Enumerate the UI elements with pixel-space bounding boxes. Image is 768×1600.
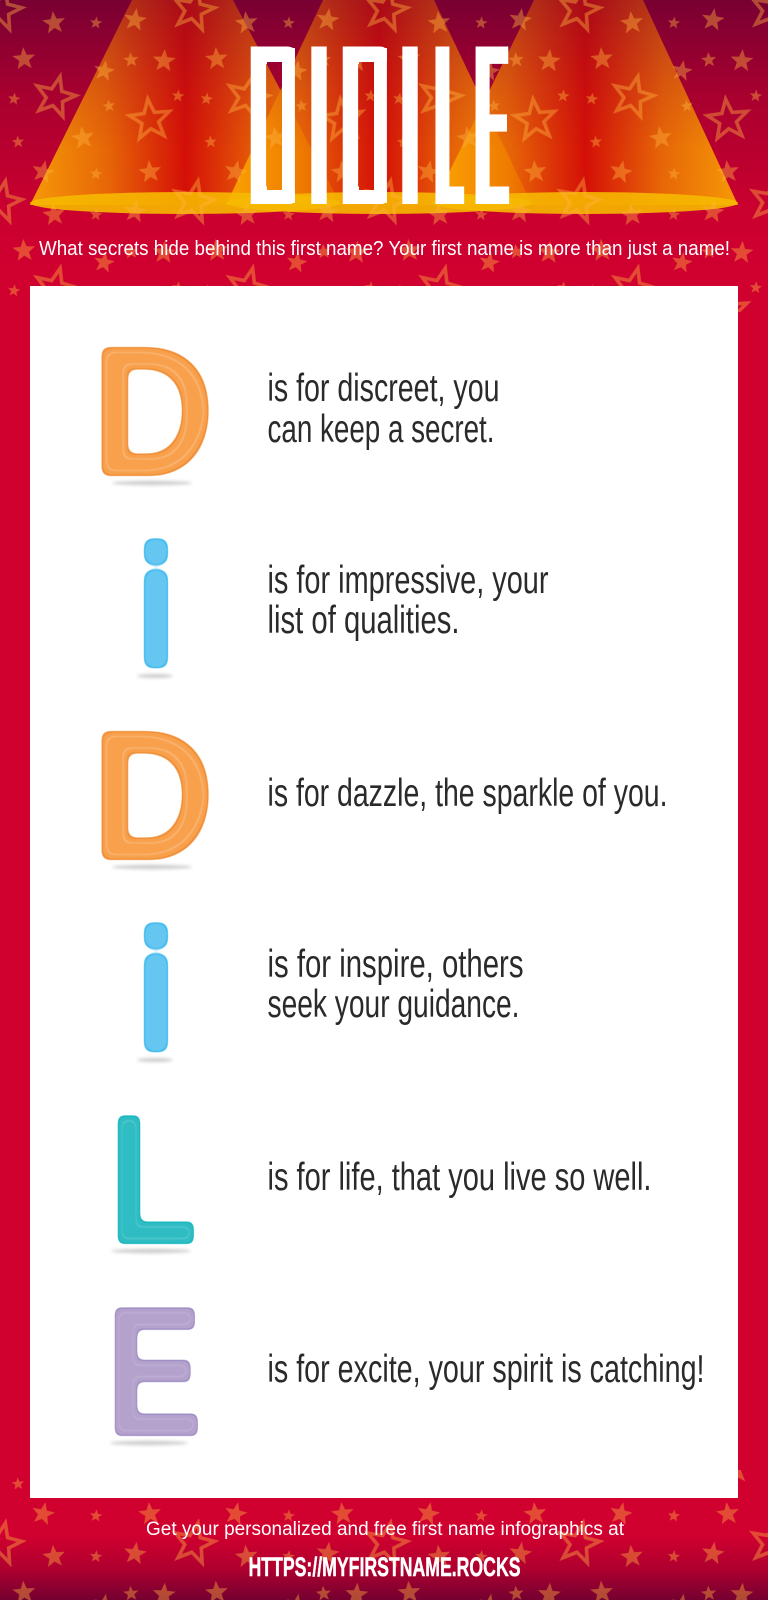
spotlights bbox=[30, 0, 738, 214]
subtitle: What secrets hide behind this first name? Your first name is more than just a name! bbox=[39, 238, 730, 260]
text line: seek your guidance. bbox=[268, 983, 520, 1026]
icon: letter E: E bbox=[106, 1270, 203, 1475]
icon: letter i: i bbox=[140, 899, 172, 1081]
row: E excite bbox=[106, 1270, 705, 1475]
star pattern bottom bbox=[0, 1470, 768, 1600]
panel: letters bbox=[30, 286, 738, 1498]
row: D discreet bbox=[91, 308, 500, 514]
title: D bbox=[251, 0, 293, 253]
footer url: HTTPS://MYFIRSTNAME.ROCKS bbox=[248, 1552, 520, 1582]
icon: letter i: i bbox=[140, 515, 172, 697]
title: L bbox=[437, 0, 460, 253]
row: L life bbox=[109, 1078, 652, 1283]
icon: letter D: D bbox=[91, 692, 215, 898]
title: I bbox=[311, 0, 327, 253]
title bbox=[250, 0, 510, 253]
footer text: Get your personalized and free first name infographics at bbox=[146, 1519, 625, 1540]
text line: is for impressive, your bbox=[268, 559, 549, 602]
row: i inspire bbox=[137, 899, 524, 1081]
title: D bbox=[343, 0, 385, 253]
title: E bbox=[477, 0, 506, 253]
text line: is for discreet, you bbox=[268, 367, 500, 410]
icon: letter L: L bbox=[109, 1078, 198, 1283]
row: i impressive bbox=[137, 515, 549, 697]
text line: is for inspire, others bbox=[268, 943, 524, 986]
text line: is for life, that you live so well. bbox=[268, 1156, 652, 1199]
icon: letter D: D bbox=[91, 308, 215, 514]
row: D dazzle bbox=[91, 692, 668, 898]
text line: can keep a secret. bbox=[268, 408, 494, 451]
text line: list of qualities. bbox=[268, 599, 460, 642]
title: I bbox=[402, 0, 418, 253]
star pattern top bbox=[0, 0, 768, 312]
